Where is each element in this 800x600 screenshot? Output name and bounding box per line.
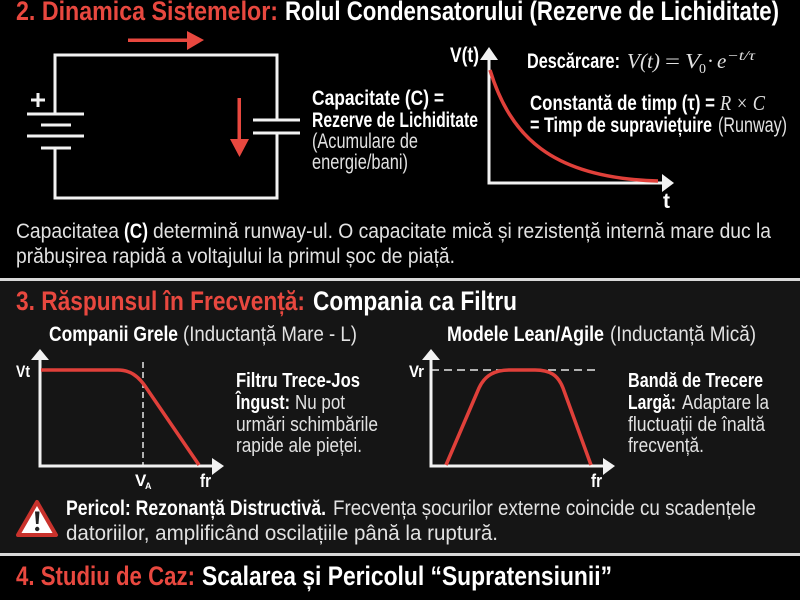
chart: band-pass filter: fr <box>591 471 602 491</box>
text block: discharge formula <box>527 49 756 77</box>
chart: band-pass filter <box>409 349 615 491</box>
heading: lean models <box>447 322 756 346</box>
text block: narrow low-pass: rapide ale pieței. <box>236 435 362 457</box>
heading: heavy companies: (Inductanță Mare - L) <box>183 322 357 346</box>
text block: wide band-pass <box>628 370 770 457</box>
text block: time constant: Constantă de timp (τ) = <box>530 92 715 115</box>
text block: capacitance: Rezerve de Lichiditate <box>312 109 478 132</box>
chart: low-pass filter: Vt <box>16 362 30 381</box>
text block: narrow low-pass: urmări schimbările <box>236 414 378 436</box>
callout: destructive resonance: datoriilor, amplificând oscilațiile până la ruptură. <box>66 521 498 545</box>
heading: section 4: 4. Studiu de Caz: <box>16 561 195 591</box>
text block: runway paragraph <box>16 219 771 268</box>
text block: discharge formula: e <box>717 49 726 73</box>
chart: low-pass filter <box>16 349 224 491</box>
text block: runway paragraph: prăbușirea rapidă a voltajului la primul șoc de piață. <box>16 244 455 268</box>
chart: voltage discharge curve: t <box>663 190 670 213</box>
text block: narrow low-pass <box>235 370 378 457</box>
text block: narrow low-pass: Filtru Trece-Jos <box>236 370 360 392</box>
text block: wide band-pass: Largă: <box>628 392 676 414</box>
text block: discharge formula: · <box>707 49 714 73</box>
panel: background section 4 <box>0 555 800 600</box>
heading: section 3 <box>16 286 517 316</box>
text block: runway paragraph: Capacitatea <box>16 219 119 243</box>
text block: time constant <box>530 91 787 137</box>
heading: section 2 <box>16 0 779 26</box>
text block: discharge formula: V(t) <box>627 49 660 73</box>
panel: background section 3 <box>0 279 800 555</box>
arrow: current direction <box>128 31 204 50</box>
text block: discharge formula: 0 <box>699 62 706 77</box>
text block: wide band-pass: frecvență. <box>628 435 704 457</box>
heading: section 3: Compania ca Filtru <box>313 286 517 316</box>
text block: discharge formula: = <box>665 49 680 73</box>
text block: narrow low-pass: Îngust: <box>235 390 290 414</box>
heading: section 4: Scalarea și Pericolul “Supratensiunii” <box>202 561 612 591</box>
text block: capacitance <box>312 87 478 174</box>
text block: wide band-pass: fluctuații de înaltă <box>628 414 766 436</box>
chart: low-pass filter: V <box>135 471 147 490</box>
chart: band-pass filter: Vr <box>409 362 424 381</box>
text block: time constant: = Timp de supraviețuire <box>530 114 712 137</box>
text block: time constant: R × C <box>719 91 766 115</box>
text block: discharge formula: V <box>685 49 703 73</box>
text block: capacitance: (Acumulare de <box>312 130 418 153</box>
heading: section 3: 3. Răspunsul în Frecvență: <box>16 286 305 316</box>
text block: discharge formula: −t/τ <box>727 49 756 64</box>
chart: low-pass filter: fr <box>200 471 211 491</box>
text block: runway paragraph: (C) <box>124 219 148 243</box>
text block: wide band-pass: Bandă de Trecere <box>628 370 763 392</box>
heading: section 4 <box>16 561 612 591</box>
arrow: capacitor charge <box>230 98 249 157</box>
text block: narrow low-pass: Nu pot <box>295 392 345 414</box>
heading: lean models: Modele Lean/Agile <box>447 322 604 346</box>
chart: low-pass filter: A <box>145 481 152 491</box>
icon: warning triangle <box>18 502 56 535</box>
callout: destructive resonance: Pericol: Rezonanță Distructivă. <box>66 496 326 520</box>
heading: heavy companies: Companii Grele <box>49 322 178 346</box>
callout: destructive resonance <box>66 496 756 545</box>
text block: capacitance: energie/bani) <box>312 151 408 174</box>
text block: discharge formula: Descărcare: <box>527 50 620 73</box>
text block: wide band-pass: Adaptare la <box>682 392 770 414</box>
heading: lean models: (Inductanță Mică) <box>610 322 756 346</box>
icon: circuit diagram <box>27 55 300 198</box>
chart: voltage discharge curve: V(t) <box>450 44 479 67</box>
panel: background section 2 <box>0 0 800 279</box>
chart: voltage discharge curve <box>450 44 674 213</box>
heading: heavy companies <box>49 322 357 346</box>
text block: capacitance: Capacitate (C) = <box>312 87 444 110</box>
